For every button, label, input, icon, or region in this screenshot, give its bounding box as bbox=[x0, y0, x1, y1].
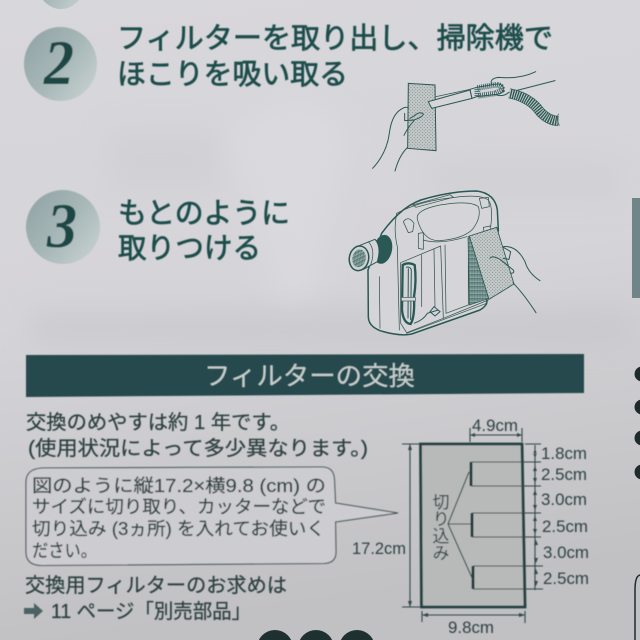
step 3 instruction bbox=[118, 198, 290, 265]
replacement interval text: (使用状況によって多少異なります。) bbox=[28, 437, 368, 460]
callout: cutting instructions: ださい。 bbox=[32, 541, 97, 561]
dotted filter bbox=[469, 227, 514, 299]
overall width bbox=[422, 611, 525, 637]
callout: cutting instructions bbox=[26, 467, 398, 566]
step 3 instruction: 取りつける bbox=[118, 233, 261, 265]
illustration: reinstalling the filter in the unit bbox=[347, 191, 540, 335]
replacement filter reference: 交換用フィルターのお求めは bbox=[25, 574, 287, 597]
segment dimensions bbox=[541, 444, 589, 588]
width of notch position: 4.9cm bbox=[472, 416, 518, 435]
air outlet nozzle bbox=[347, 233, 395, 272]
step 3 number disc bbox=[26, 190, 100, 264]
unit body bbox=[368, 191, 498, 335]
step 2 instruction: フィルターを取り出し、掃除機で bbox=[117, 22, 553, 55]
step 3 number disc: 3 bbox=[46, 190, 77, 261]
adjacent page: box outline bbox=[635, 575, 640, 640]
callout: cutting instructions: 切り込み (3ヵ所) を入れてお使いく bbox=[32, 519, 325, 539]
filter sheet bbox=[420, 444, 525, 607]
replacement interval text: 交換のめやすは約 1 年です。 bbox=[26, 411, 290, 434]
step 3 bbox=[26, 190, 290, 265]
holding hand bbox=[373, 107, 423, 171]
overall height bbox=[352, 444, 420, 607]
hand bbox=[490, 247, 540, 313]
replacement filter reference bbox=[24, 574, 287, 623]
step 1 disc remnant bbox=[34, 0, 88, 9]
inner filter grille bbox=[468, 236, 488, 305]
step 2 number disc bbox=[24, 27, 97, 101]
notch label and leaders bbox=[430, 472, 473, 580]
segment dimensions: 3.0cm bbox=[543, 543, 589, 562]
arrow icon bbox=[24, 603, 43, 619]
replacement filter reference: 11 ページ「別売部品」 bbox=[51, 600, 251, 623]
dimension guide lines bbox=[471, 444, 543, 589]
section heading bar bbox=[26, 354, 584, 397]
callout: cutting instructions: 図のように縦17.2×横9.8 (cm) の bbox=[32, 476, 326, 496]
filter sheet bbox=[408, 83, 436, 151]
callout: cutting instructions: サイズに切り取り、カッターなどで bbox=[32, 497, 326, 517]
segment dimensions: 2.5cm bbox=[542, 517, 588, 536]
segment dimensions: 2.5cm bbox=[543, 569, 589, 588]
power cord bbox=[401, 263, 440, 324]
filter compartment bbox=[401, 237, 488, 333]
step 2 bbox=[24, 22, 553, 101]
step 3 instruction: もとのように bbox=[118, 198, 290, 230]
show-through ghost marks bbox=[30, 95, 630, 344]
page-bottom icons bbox=[257, 630, 375, 640]
section heading bar: フィルターの交換 bbox=[204, 361, 415, 391]
replacement interval text bbox=[26, 411, 368, 460]
overall width: 9.8cm bbox=[448, 618, 494, 637]
adjacent page: side tab bbox=[632, 198, 640, 298]
vacuum nozzle and grip bbox=[428, 72, 555, 108]
adjacent page: bullet marks bbox=[634, 366, 640, 480]
notches bbox=[471, 462, 473, 589]
step 2 number disc: 2 bbox=[43, 27, 74, 98]
filter cutting diagram bbox=[352, 416, 589, 637]
step 2 instruction bbox=[117, 22, 553, 91]
width of notch position bbox=[470, 416, 522, 442]
hose bbox=[509, 93, 559, 125]
illustration: vacuuming the filter bbox=[373, 72, 559, 171]
notch label and leaders: 切り込み bbox=[430, 493, 449, 561]
segment dimensions: 1.8cm bbox=[541, 444, 587, 463]
handle and top details bbox=[379, 195, 492, 330]
overall height: 17.2cm bbox=[352, 539, 406, 558]
segment dimensions: 2.5cm bbox=[541, 465, 587, 484]
step 2 instruction: ほこりを吸い取る bbox=[117, 59, 348, 91]
segment dimensions: 3.0cm bbox=[541, 490, 587, 509]
